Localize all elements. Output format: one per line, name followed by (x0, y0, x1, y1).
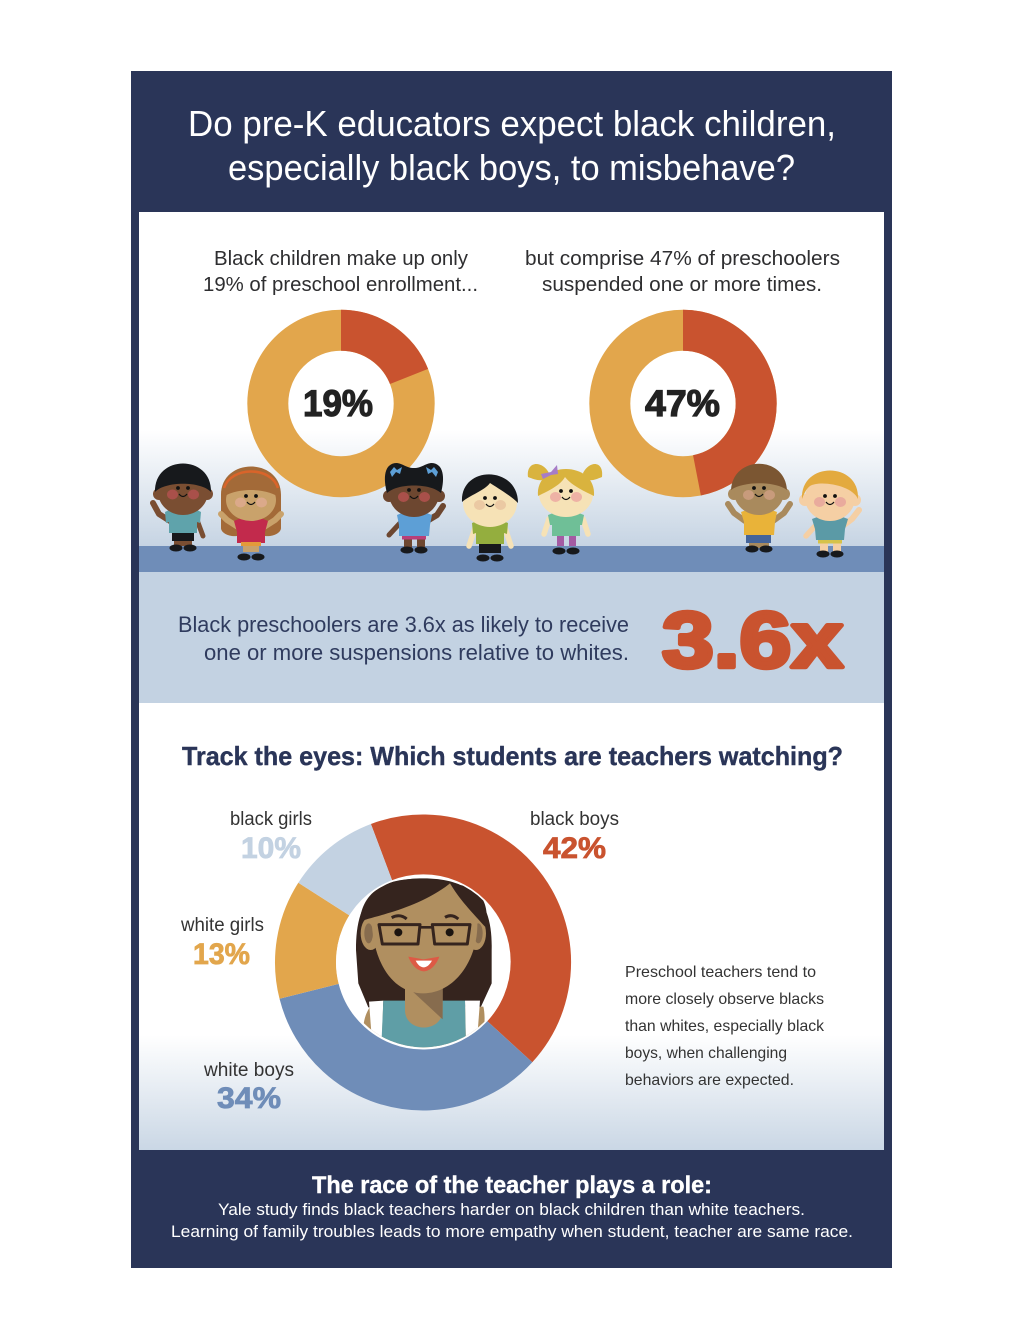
label: black girls 10%: 10% (241, 832, 301, 865)
text: likelihood statement: Black preschoolers are 3.6x as likely to receive (178, 612, 629, 637)
label: black boys 42%: 42% (543, 832, 606, 865)
title (188, 103, 836, 188)
text: teacher observation note: boys, when challenging (625, 1045, 787, 1062)
big number: 3.6x: 3.6x (662, 595, 843, 684)
title: Do pre-K educators expect black children, (188, 103, 836, 144)
donut chart: 47%: 47% (645, 383, 720, 424)
label: black girls 10%: black girls (230, 809, 312, 830)
footer text: Learning of family troubles leads to more empathy when student, teacher are same race. (171, 1222, 853, 1241)
text: teacher observation note: than whites, especially black (625, 1018, 825, 1035)
text: enrollment statement: Black children make up only (214, 248, 468, 270)
icon: teacher portrait (336, 874, 511, 1053)
icon: child 1 (153, 464, 213, 552)
label: black boys 42%: black boys (530, 809, 619, 830)
donut chart: 19% (268, 330, 414, 477)
text: suspension statement (525, 248, 840, 296)
navy frame (131, 71, 892, 1268)
donut chart: 19%: 19% (303, 383, 373, 424)
text: enrollment statement: 19% of preschool enrollment... (203, 274, 478, 296)
icon: child 3 (383, 463, 445, 554)
text: likelihood statement: one or more suspensions relative to whites. (204, 640, 629, 665)
label: white boys 34%: 34% (217, 1082, 281, 1115)
heading: track the eyes: Track the eyes: Which students are teachers watching? (182, 741, 843, 771)
icon: child 5 (528, 464, 602, 554)
text: teacher observation note: Preschool teachers tend to (625, 964, 816, 981)
icon: child 4 (462, 474, 518, 562)
panel: track the eyes (139, 703, 884, 1150)
text: teacher observation note (625, 964, 825, 1089)
label: black boys 42% (530, 809, 619, 865)
footer text (171, 1172, 853, 1241)
footer text: Yale study finds black teachers harder on black children than white teachers. (218, 1200, 805, 1219)
label: white boys 34%: white boys (203, 1060, 294, 1081)
text: suspension statement: suspended one or more times. (542, 274, 822, 296)
icon: child 2 (221, 466, 281, 560)
icon: child 7 (799, 470, 861, 558)
donut chart: 47% (610, 330, 756, 477)
text: likelihood statement (178, 612, 629, 665)
icon: child 6 (728, 464, 790, 552)
text: suspension statement: but comprise 47% of preschoolers (525, 248, 840, 270)
panel: 3.6x callout (139, 572, 884, 703)
title: especially black boys, to misbehave? (228, 147, 795, 188)
footer text: The race of the teacher plays a role: (312, 1172, 712, 1199)
label: white girls 13% (180, 915, 264, 971)
label: white girls 13%: white girls (180, 915, 264, 936)
text: teacher observation note: behaviors are expected. (625, 1072, 794, 1089)
text: teacher observation note: more closely observe blacks (625, 991, 824, 1008)
label: white boys 34% (203, 1060, 294, 1115)
panel: preschool enrollment vs suspension (139, 212, 884, 572)
label: black girls 10% (230, 809, 312, 865)
label: white girls 13%: 13% (193, 938, 250, 971)
donut chart: students watched (257, 797, 589, 1128)
text: enrollment statement (203, 248, 478, 296)
